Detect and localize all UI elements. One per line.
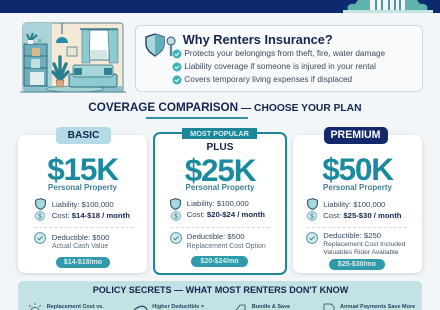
icon: dollar: $ bbox=[310, 214, 314, 220]
price pill bbox=[329, 259, 385, 270]
list item: protects: Protects your belongings from theft, fire, water damage bbox=[184, 49, 385, 58]
icon: shield bbox=[307, 198, 318, 210]
panel: plus plan bbox=[153, 132, 287, 275]
icon: umbrella bbox=[134, 306, 148, 310]
icon: bulb bbox=[28, 303, 42, 310]
badge: most popular: MOST POPULAR bbox=[190, 129, 249, 138]
tip: replacement cost: Replacement Cost vs. bbox=[47, 304, 104, 310]
label: Personal Property bbox=[186, 182, 254, 192]
icon: dollar bbox=[307, 211, 317, 221]
deductible: Deductible: $250 bbox=[323, 231, 381, 240]
deductible: Deductible: $500 bbox=[52, 232, 109, 242]
icon: tag bbox=[236, 304, 246, 310]
icon: dollar: $ bbox=[174, 213, 178, 220]
heading: why renters insurance: Why Renters Insurance? bbox=[183, 32, 333, 47]
price pill: $20-$24/mo bbox=[200, 258, 239, 265]
list item: living expenses: Covers temporary living expenses if displaced bbox=[184, 74, 352, 84]
label: Personal Property bbox=[48, 183, 117, 192]
cost: Cost: $20-$24 / month bbox=[187, 210, 265, 219]
cost: Cost: $25-$30 / month bbox=[323, 211, 402, 220]
liability: Liability: $100,000 bbox=[323, 200, 385, 209]
badge: most popular bbox=[182, 128, 257, 139]
note: Replacement Cost Option bbox=[187, 242, 266, 250]
price pill: $14-$18/mo bbox=[64, 258, 102, 266]
deductible: Deductible: $500 bbox=[187, 232, 244, 241]
note: Actual Cash Value bbox=[52, 243, 108, 250]
label: Personal Property bbox=[323, 183, 392, 192]
badge: premium: PREMIUM bbox=[330, 129, 381, 141]
price pill bbox=[191, 256, 248, 267]
tip: higher deductible: Higher Deductible = bbox=[152, 304, 204, 310]
title underline bbox=[146, 117, 248, 119]
price: $25K bbox=[185, 152, 255, 188]
section title: COVERAGE COMPARISON — CHOOSE YOUR PLAN bbox=[88, 101, 362, 114]
icon: check bbox=[170, 232, 182, 244]
price: $50K bbox=[322, 151, 393, 187]
price pill: $25-$30/mo bbox=[338, 261, 376, 268]
icon: dollar bbox=[171, 211, 181, 221]
tip: bundle and save: Bundle & Save bbox=[252, 304, 290, 310]
panel: policy secrets bbox=[18, 281, 422, 310]
illustration: living room bbox=[20, 22, 126, 92]
price: $15K bbox=[47, 151, 118, 187]
panel: basic plan bbox=[18, 135, 147, 273]
plan name: PLUS bbox=[207, 142, 233, 152]
cost: Cost: $14-$18 / month bbox=[52, 211, 130, 220]
price pill bbox=[56, 256, 110, 268]
badge: basic bbox=[56, 127, 111, 144]
panel: premium plan bbox=[293, 135, 422, 273]
icon: check bbox=[34, 232, 46, 244]
icon: shield and key bbox=[145, 33, 176, 57]
badge: basic: BASIC bbox=[68, 130, 99, 141]
heading: policy secrets: POLICY SECRETS — WHAT MOST RENTERS DON'T KNOW bbox=[93, 284, 348, 294]
note: valuables rider: Valuables Rider Available bbox=[323, 249, 399, 256]
icon: shield bbox=[170, 198, 181, 210]
liability: Liability: $100,000 bbox=[187, 199, 249, 208]
header band bbox=[0, 0, 440, 13]
icon: shield bbox=[35, 198, 46, 210]
badge: premium bbox=[324, 127, 388, 144]
icon: dollar bbox=[35, 211, 45, 221]
icon: document bbox=[324, 304, 334, 310]
liability: Liability: $100,000 bbox=[52, 200, 114, 209]
icon: check bbox=[306, 232, 318, 244]
tip: annual payments: Annual Payments Save More bbox=[340, 304, 415, 310]
icon: house in header bbox=[343, 0, 433, 13]
list item: liability: Liability coverage if someone is injured in your rental bbox=[184, 62, 376, 71]
note: replacement cost: Replacement Cost Included bbox=[323, 241, 405, 248]
panel: why renters insurance bbox=[135, 25, 423, 92]
icon: dollar: $ bbox=[38, 214, 42, 220]
